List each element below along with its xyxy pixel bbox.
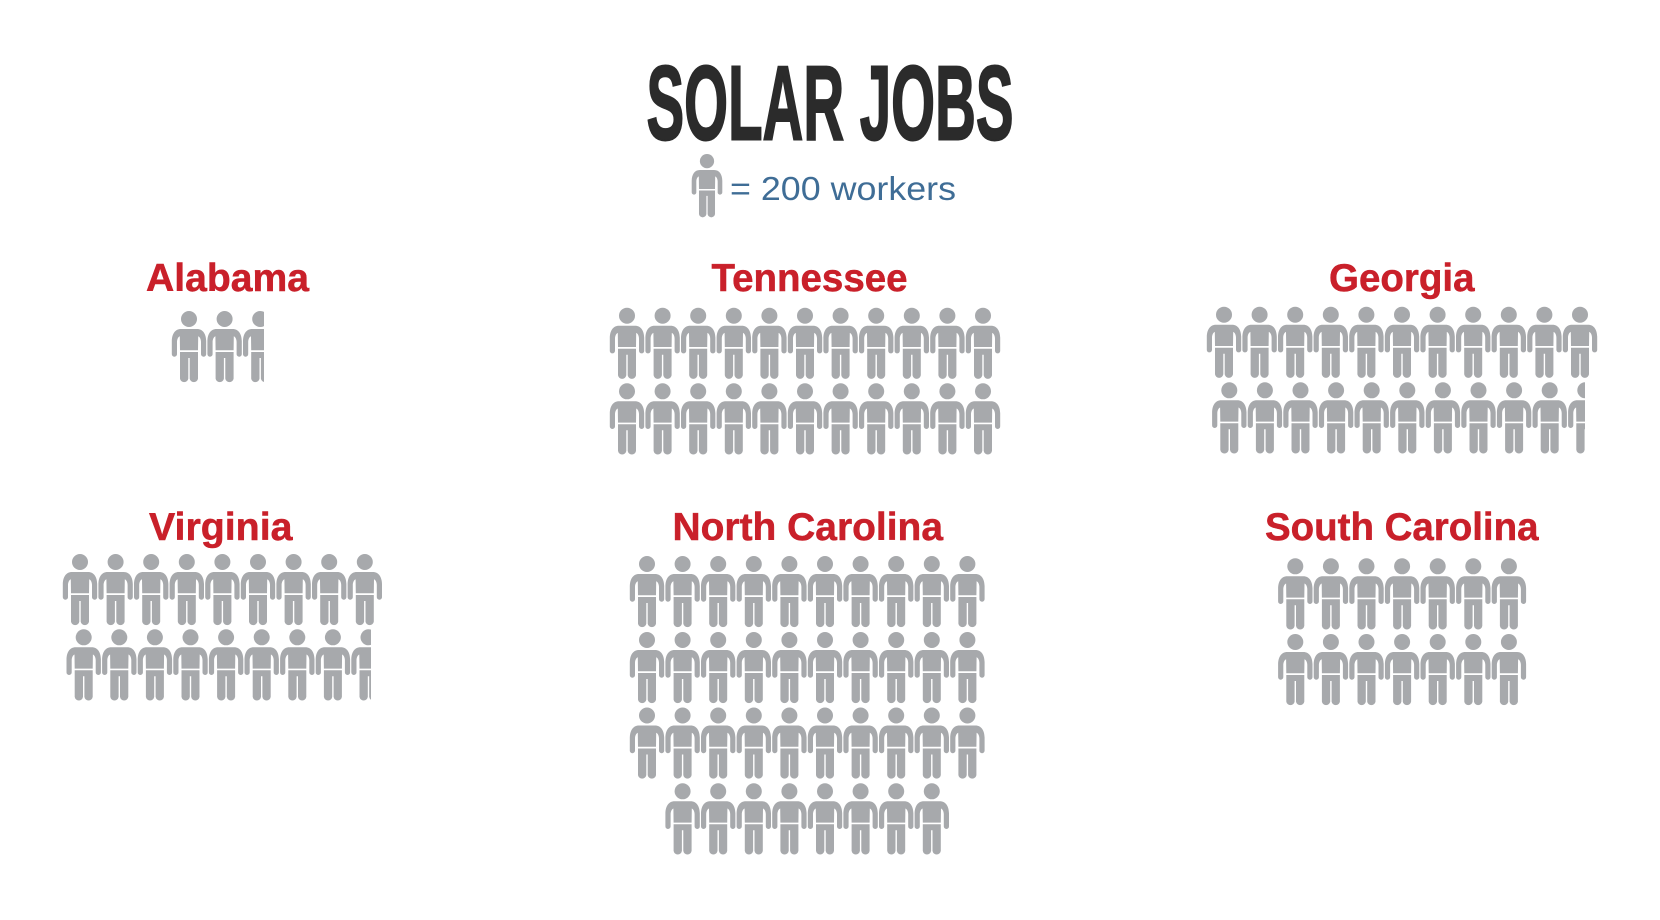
heading: South Carolina: South Carolina <box>1265 506 1539 549</box>
panel: Virginia <box>63 506 386 700</box>
title: SOLAR JOBS <box>646 44 1014 162</box>
panel: Georgia <box>1207 257 1603 453</box>
heading: North Carolina: North Carolina <box>672 506 943 549</box>
panel: Alabama <box>146 257 309 382</box>
heading: Tennessee: Tennessee <box>712 257 908 300</box>
heading: Georgia: Georgia <box>1329 257 1475 300</box>
legend text: = 200 workers <box>730 170 956 207</box>
panel: South Carolina <box>1265 506 1539 705</box>
panel: Tennessee <box>610 257 1000 454</box>
panel: North Carolina <box>630 506 985 854</box>
legend: one icon equals 200 workers <box>692 154 956 217</box>
pictogram: Tennessee workers <box>610 308 1000 454</box>
pictogram: North Carolina workers <box>630 556 985 854</box>
pictogram: Alabama workers <box>172 311 264 382</box>
heading: Alabama: Alabama <box>146 257 309 300</box>
heading: Virginia: Virginia <box>149 506 293 549</box>
pictogram: Virginia workers <box>63 554 386 700</box>
pictogram: Georgia workers <box>1207 307 1603 453</box>
icon: worker legend <box>692 154 722 217</box>
pictogram: South Carolina workers <box>1278 558 1526 705</box>
